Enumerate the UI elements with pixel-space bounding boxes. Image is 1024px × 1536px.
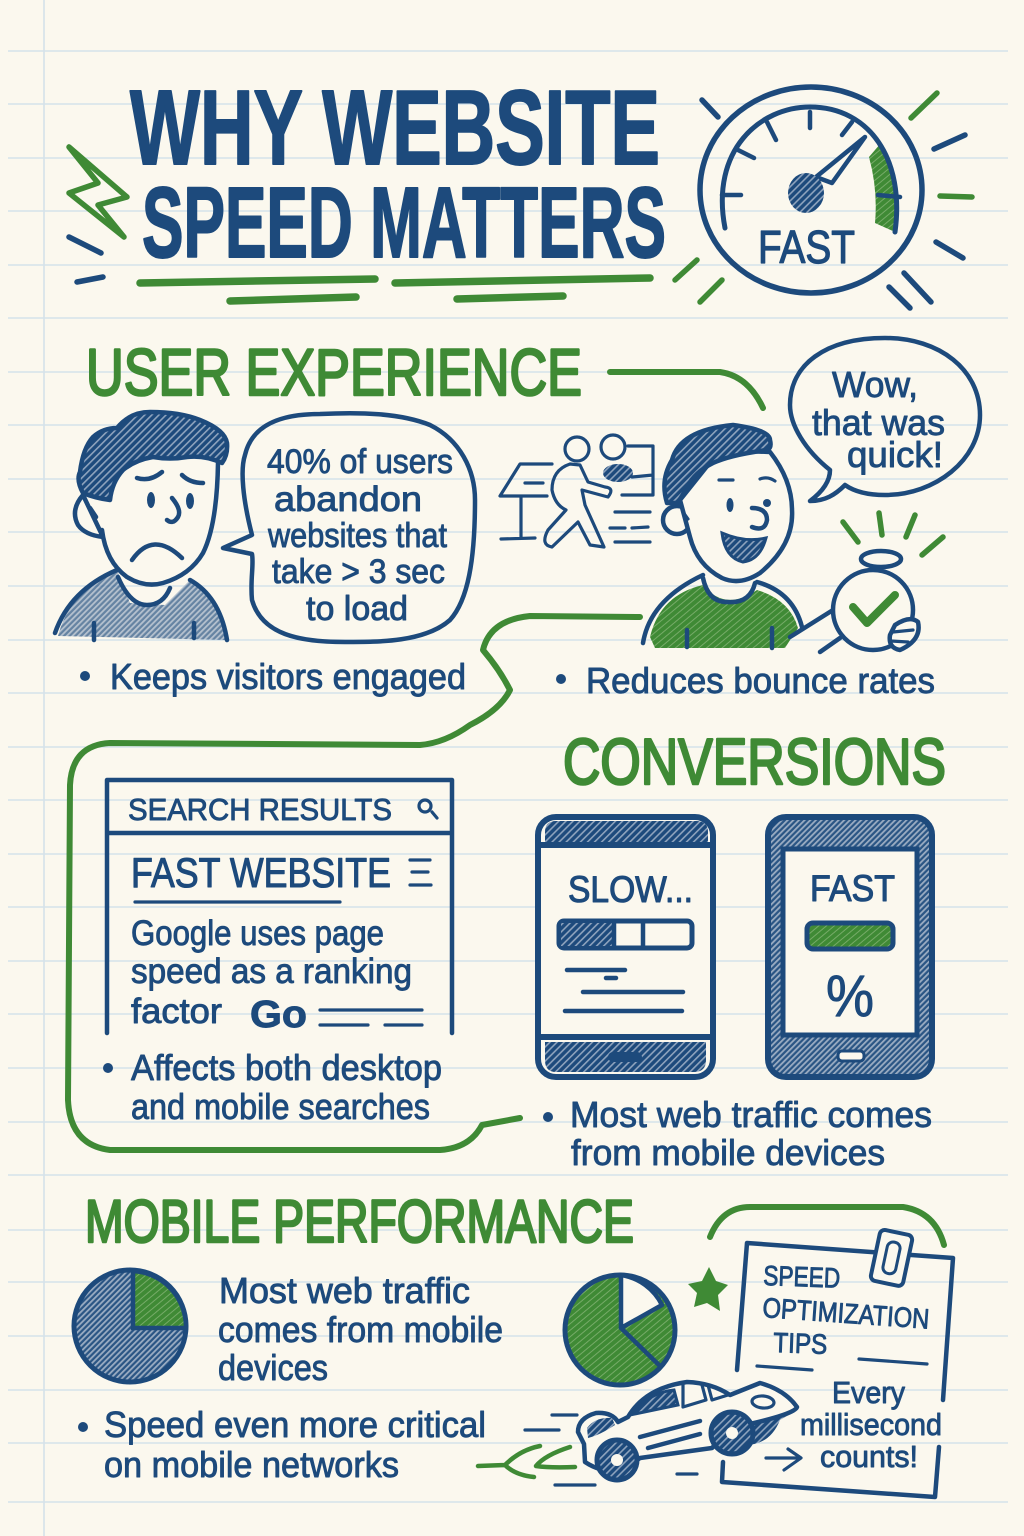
text: most web traffic: comes from mobile xyxy=(218,1309,503,1350)
speech bubble: abandon statistic: websites that xyxy=(267,517,447,555)
icon: speedometer: FAST xyxy=(758,221,855,273)
speech bubble: abandon statistic xyxy=(223,413,475,642)
bullet: mobile traffic xyxy=(543,1094,932,1173)
bullet: mobile networks: Speed even more critical xyxy=(104,1404,486,1445)
bullet: mobile networks xyxy=(78,1404,486,1485)
icon: stopwatch with check mark xyxy=(790,513,943,652)
bullet: desktop and mobile searches: and mobile searches xyxy=(131,1086,430,1127)
text: most web traffic: Most web traffic xyxy=(219,1270,470,1311)
note: speed optimization tips: TIPS xyxy=(773,1327,828,1360)
illustration: happy user xyxy=(643,425,802,648)
speech bubble: abandon statistic: 40% of users xyxy=(267,443,453,481)
bullet: mobile traffic: from mobile devices xyxy=(571,1132,885,1173)
bullet: mobile traffic: Most web traffic comes xyxy=(570,1094,932,1135)
connector: winding green path xyxy=(68,616,640,1150)
text: most web traffic: devices xyxy=(218,1347,328,1388)
note: speed optimization tips: millisecond xyxy=(800,1407,942,1442)
arc above note xyxy=(710,1207,944,1245)
panel: search results: Go xyxy=(250,994,307,1036)
pie chart: green slices xyxy=(565,1275,675,1385)
title: WHY WEBSITE xyxy=(130,69,660,187)
note: speed optimization tips: SPEED xyxy=(763,1260,841,1294)
illustration: speeding car xyxy=(478,1382,797,1485)
icon: green star xyxy=(688,1267,728,1311)
panel: search results: speed as a ranking xyxy=(131,952,412,991)
note: speed optimization tips xyxy=(722,1229,953,1497)
speech bubble: wow that was quick: quick! xyxy=(847,434,943,475)
bullet: keeps visitors engaged: Keeps visitors engaged xyxy=(110,656,466,697)
bullet: desktop and mobile searches: Affects both desktop xyxy=(131,1047,442,1088)
text: most web traffic xyxy=(218,1270,503,1388)
speech bubble: abandon statistic: take > 3 sec xyxy=(272,553,445,591)
speech bubble: wow that was quick xyxy=(790,338,980,501)
bullet: reduces bounce rates: Reduces bounce rates xyxy=(586,660,935,701)
speech bubble: wow that was quick: Wow, xyxy=(832,364,918,405)
phone: slow xyxy=(538,817,713,1077)
illustration: frustrated user xyxy=(55,412,227,640)
speech bubble: abandon statistic: to load xyxy=(306,590,408,628)
bullet: mobile networks: on mobile networks xyxy=(104,1444,399,1485)
note: speed optimization tips: OPTIMIZATION xyxy=(762,1292,930,1335)
phone: slow: SLOW... xyxy=(568,869,693,910)
pie chart: mobile traffic share xyxy=(74,1270,186,1382)
panel: search results: Google uses page xyxy=(131,914,384,953)
icon: lightning bolt xyxy=(69,147,127,282)
connector: heading to happy user xyxy=(610,372,763,408)
icon: magnifier xyxy=(419,800,437,818)
icon: speedometer xyxy=(675,87,972,308)
heading: mobile performance: MOBILE PERFORMANCE xyxy=(85,1188,634,1255)
speech bubble: abandon statistic: abandon xyxy=(274,480,422,519)
icon: arrow xyxy=(766,1449,801,1470)
phone: fast xyxy=(768,817,932,1077)
title: SPEED MATTERS xyxy=(142,167,666,279)
note: speed optimization tips: Every xyxy=(832,1375,905,1410)
panel: search results: FAST WEBSITE xyxy=(131,849,391,896)
note: speed optimization tips: counts! xyxy=(820,1439,918,1474)
panel: search results xyxy=(107,780,452,1036)
phone: fast: FAST xyxy=(810,868,895,909)
panel: search results: factor xyxy=(131,992,222,1031)
bullet: desktop and mobile searches xyxy=(103,1047,442,1127)
speech bubble: wow that was quick: that was xyxy=(812,402,945,443)
panel: search results: SEARCH RESULTS xyxy=(128,792,392,827)
title underlines xyxy=(140,278,650,301)
title xyxy=(130,69,666,279)
icon: walking visitor and signpost xyxy=(500,435,653,547)
icon: paper clip xyxy=(870,1229,913,1287)
heading: user experience: USER EXPERIENCE xyxy=(86,335,582,409)
phone: fast: % xyxy=(826,964,874,1029)
